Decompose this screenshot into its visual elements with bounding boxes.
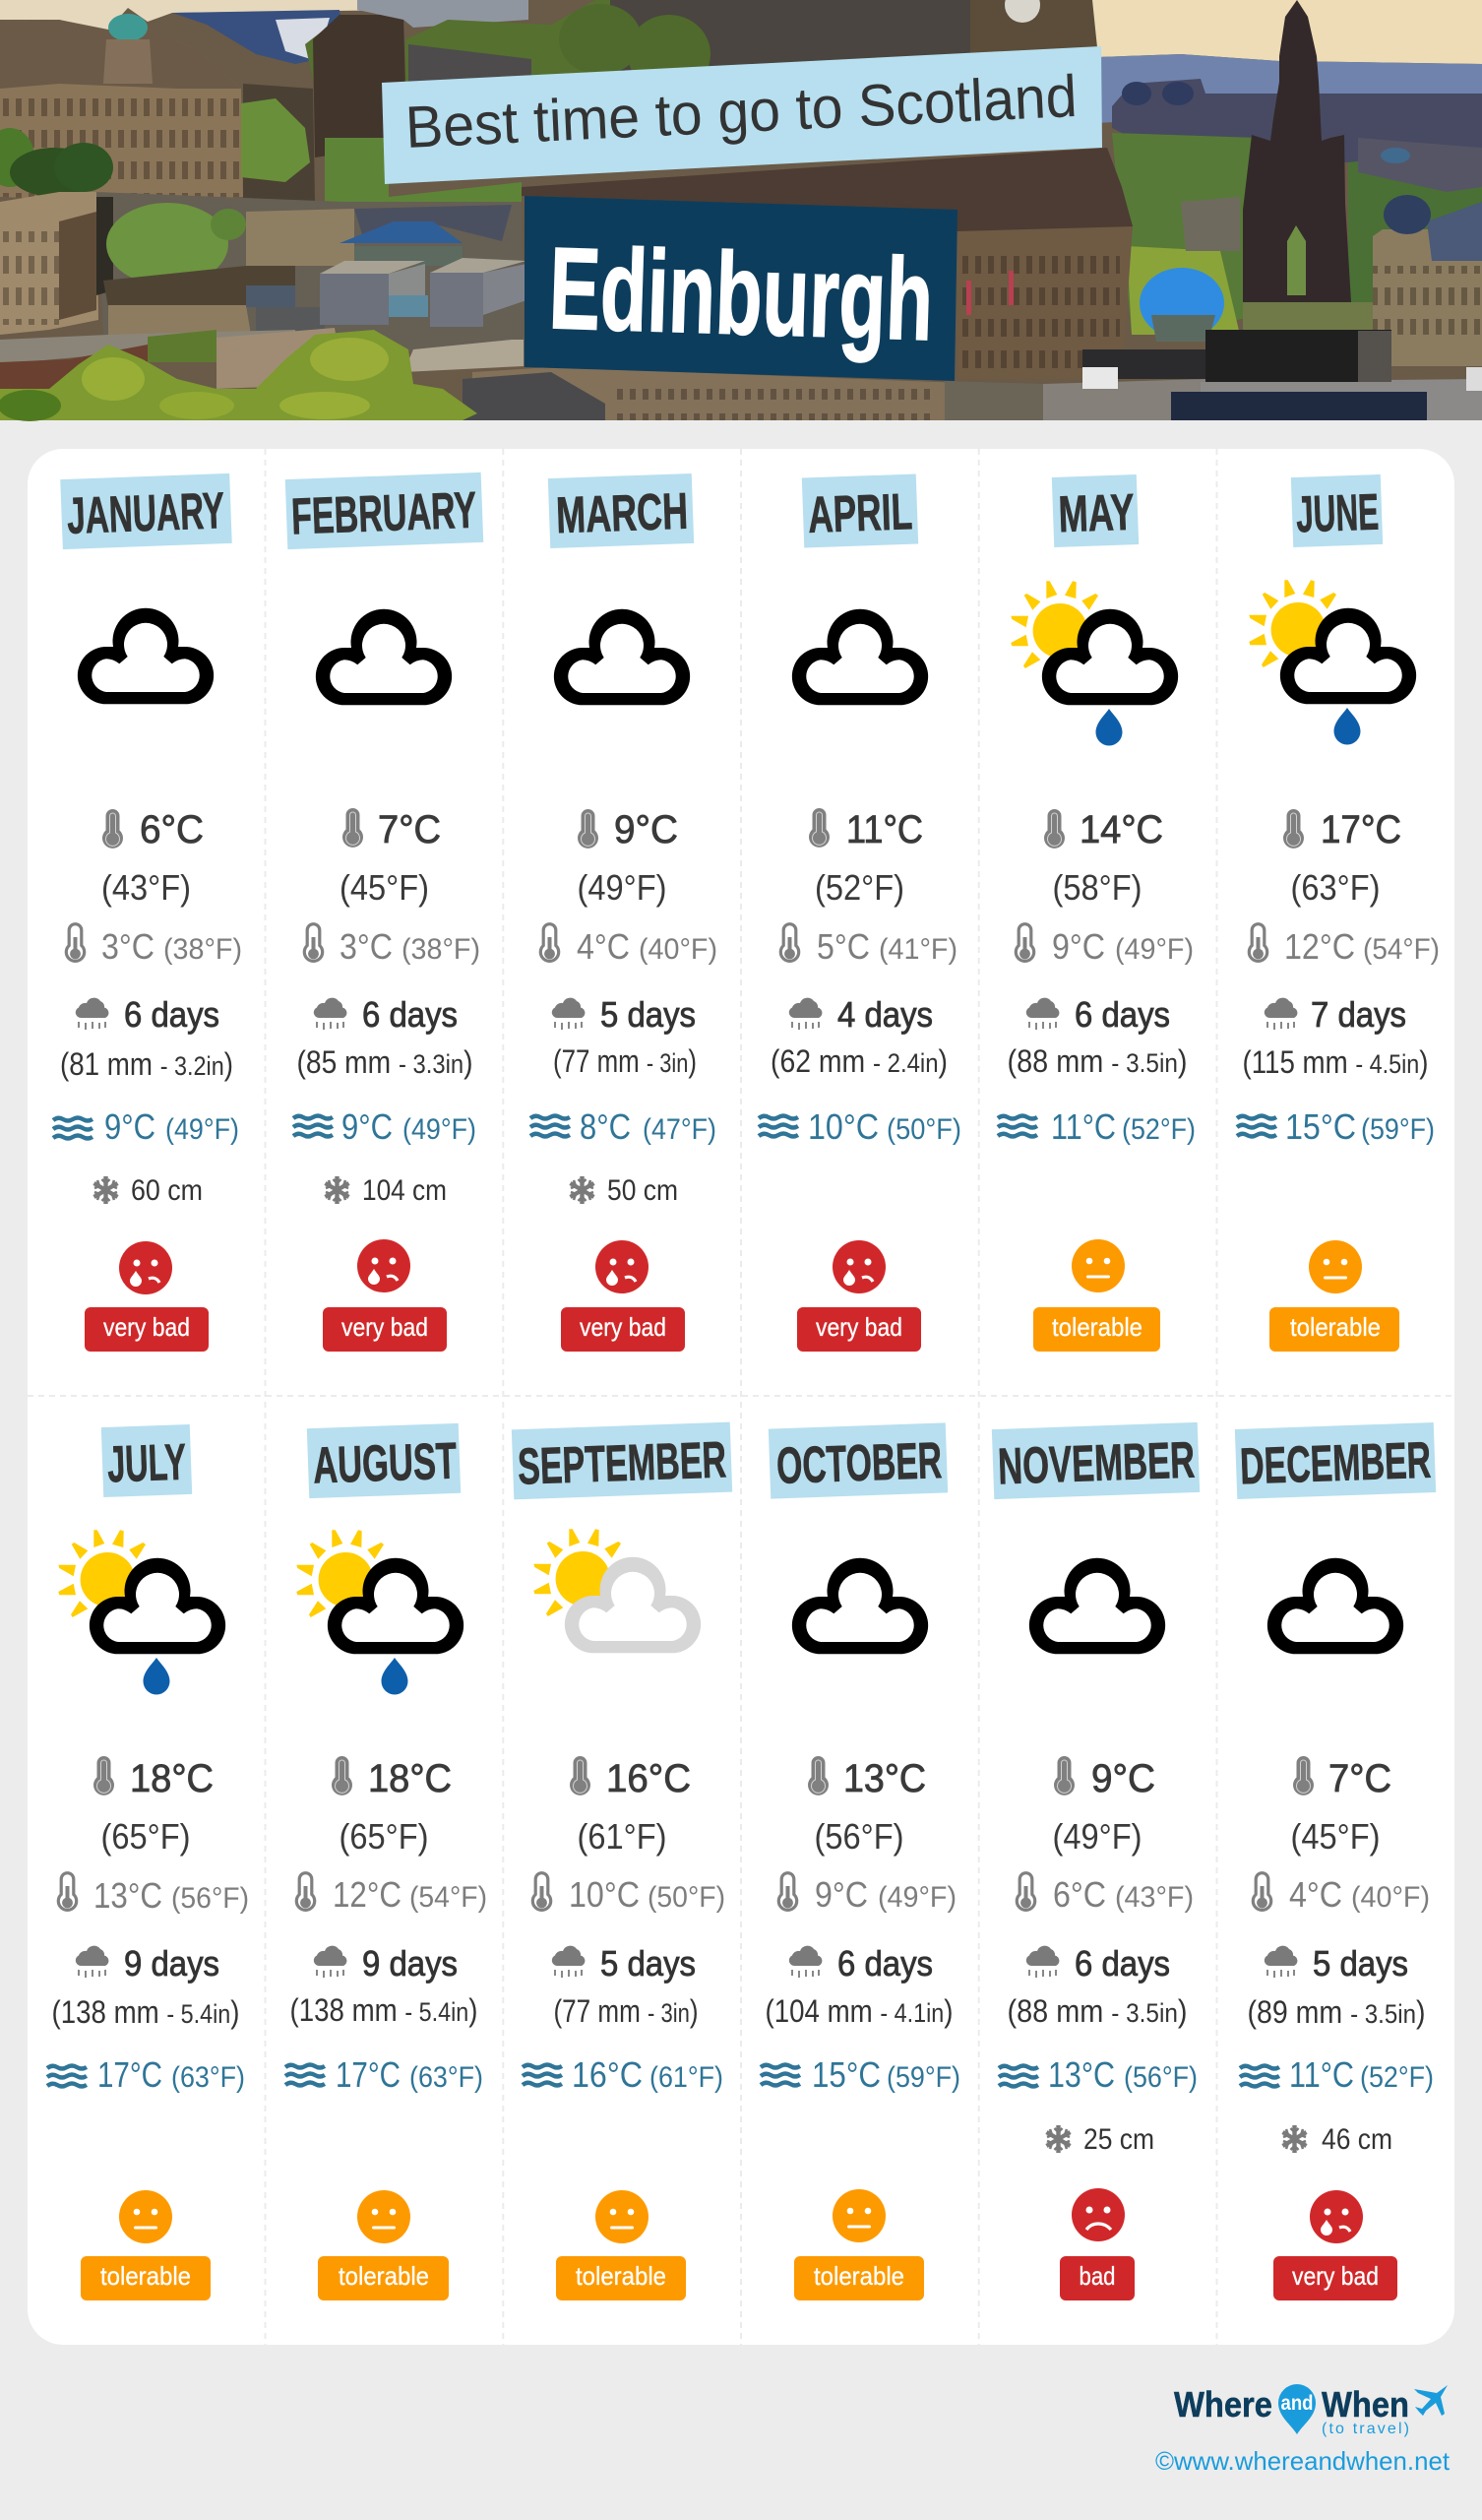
snow (571, 1174, 678, 1207)
rating: tolerable: tolerable (576, 2261, 666, 2291)
sea temperature: (47°F) (643, 1113, 716, 1146)
rating: very bad: very bad (103, 1312, 190, 1342)
sea temperature (523, 2054, 723, 2095)
rainy days: 6 days (124, 994, 219, 1035)
high temperature Fahrenheit: (49°F) (1053, 1816, 1142, 1857)
rainfall: (81 mm - 3.2in) (60, 1046, 233, 1082)
high temperature: 9°C (1091, 1757, 1155, 1800)
high temperature: 13°C (843, 1757, 926, 1800)
label: March (548, 473, 694, 548)
snow (1283, 2123, 1392, 2156)
sea temperature: 17°C (336, 2054, 401, 2095)
sea temperature: 11°C (1051, 1106, 1116, 1147)
label: July (101, 1424, 192, 1497)
sea temperature (998, 1106, 1196, 1147)
high temperature (570, 1756, 691, 1800)
rainfall: (115 mm - 4.5in) (1242, 1044, 1429, 1080)
high temperature: 7°C (378, 808, 441, 851)
label: August (307, 1423, 461, 1498)
high temperature (578, 808, 678, 851)
sea temperature: 15°C (812, 2054, 881, 2095)
rainfall: (138 mm - 5.4in) (289, 1992, 478, 2028)
rating: tolerable: tolerable (100, 2261, 191, 2291)
high temperature Fahrenheit: (43°F) (101, 867, 191, 908)
label: July: JULY (106, 1434, 187, 1493)
rainy days (789, 1943, 933, 1984)
snow: 60 cm (131, 1174, 203, 1207)
rainy days (314, 994, 458, 1035)
sea temperature: 10°C (808, 1106, 879, 1147)
snow (94, 1174, 203, 1207)
logo: Where and When (to travel): and (1281, 2392, 1313, 2415)
icon: cloud (78, 608, 214, 704)
rainfall: (88 mm - 3.5in) (1008, 1043, 1187, 1079)
high temperature: 9°C (614, 808, 678, 851)
label: April: APRIL (807, 483, 913, 544)
rainy days (1026, 1943, 1170, 1984)
sea temperature: (52°F) (1360, 2061, 1434, 2094)
rating: bad: bad (1079, 2261, 1116, 2291)
label: April (802, 473, 918, 548)
high temperature: 6°C (140, 808, 204, 851)
high temperature (1044, 808, 1163, 851)
rainy days (1265, 994, 1406, 1035)
high temperature (809, 808, 923, 851)
rating: tolerable: tolerable (339, 2261, 429, 2291)
icon: cloud (554, 609, 690, 705)
snow (1047, 2123, 1154, 2156)
sea temperature (285, 2054, 483, 2095)
low temperature: (49°F) (878, 1881, 957, 1914)
month: January (53, 473, 242, 1352)
rainy days (552, 994, 696, 1035)
rating: tolerable (81, 2190, 211, 2300)
month: May (998, 474, 1196, 1352)
low temperature (1253, 1873, 1430, 1915)
low temperature: (49°F) (1115, 933, 1194, 966)
sea temperature: (61°F) (649, 2061, 723, 2094)
high temperature Fahrenheit: (45°F) (1291, 1816, 1380, 1857)
low temperature: 12°C (333, 1874, 401, 1915)
rainy days: 6 days (1075, 994, 1170, 1035)
rainy days: 5 days (600, 994, 696, 1035)
low temperature: (40°F) (1351, 1881, 1430, 1914)
low temperature (540, 924, 717, 967)
sea temperature (761, 2054, 960, 2095)
high temperature Fahrenheit: (65°F) (100, 1816, 191, 1857)
rating: very bad (323, 1239, 447, 1352)
rating: bad (1060, 2188, 1135, 2300)
high temperature: 11°C (846, 808, 923, 851)
low temperature: 4°C (1289, 1874, 1342, 1915)
low temperature (58, 1873, 249, 1916)
website credit: ©www.whereandwhen.net (1155, 2446, 1451, 2476)
high temperature (808, 1756, 926, 1800)
sea temperature: (59°F) (1361, 1113, 1435, 1146)
low temperature: 9°C (815, 1874, 868, 1915)
sea temperature (759, 1106, 961, 1147)
rainy days: 6 days (837, 1943, 933, 1984)
rainy days (76, 994, 219, 1035)
sea temperature: 9°C (341, 1106, 393, 1147)
rating: tolerable: tolerable (1052, 1312, 1142, 1342)
high temperature (93, 1756, 214, 1800)
rainfall: (85 mm - 3.3in) (297, 1044, 472, 1080)
logo: Where and When (to travel) (1174, 2384, 1448, 2437)
sea temperature: (63°F) (171, 2061, 245, 2094)
label: November (992, 1422, 1200, 1499)
rating: very bad: very bad (1292, 2261, 1379, 2291)
rainfall: (88 mm - 3.5in) (1008, 1993, 1187, 2029)
low temperature: 6°C (1053, 1874, 1106, 1915)
high temperature (1054, 1756, 1155, 1800)
sea temperature: 15°C (1285, 1106, 1356, 1147)
month: September (512, 1422, 732, 2300)
sea temperature: (52°F) (1122, 1113, 1196, 1146)
snow: 25 cm (1083, 2123, 1154, 2156)
logo: Where and When (to travel): Where (1174, 2384, 1272, 2425)
rainy days: 9 days (124, 1943, 219, 1984)
icon: cloud (316, 609, 452, 705)
label: May: MAY (1058, 484, 1136, 543)
month: November (992, 1422, 1200, 2300)
month: July (47, 1424, 249, 2300)
sea temperature: (49°F) (165, 1113, 239, 1146)
high temperature Fahrenheit: (52°F) (815, 867, 904, 908)
high temperature Fahrenheit: (58°F) (1053, 867, 1142, 908)
low temperature: (50°F) (648, 1881, 725, 1914)
rainy days (789, 994, 933, 1035)
high temperature (1283, 808, 1401, 851)
label: October (769, 1422, 948, 1499)
low temperature (1017, 1873, 1194, 1915)
rating: tolerable (1033, 1239, 1160, 1352)
month: August (285, 1423, 487, 2300)
low temperature: 3°C (101, 926, 154, 967)
banner: Edinburgh: Edinburgh (547, 223, 935, 365)
high temperature: 18°C (368, 1757, 452, 1800)
sea temperature: (49°F) (402, 1113, 476, 1146)
high temperature (102, 808, 204, 851)
rainy days: 5 days (1313, 1943, 1408, 1984)
rating: very bad: very bad (341, 1312, 428, 1342)
low temperature: 10°C (569, 1874, 640, 1915)
rating: very bad (561, 1240, 685, 1352)
label: February: FEBRUARY (290, 482, 477, 545)
rating: tolerable (1269, 1240, 1399, 1352)
label: February (285, 472, 483, 549)
low temperature: 5°C (817, 926, 870, 967)
banner: Best time to go to Scotland: Best time to go to Scotland (403, 63, 1079, 160)
low temperature: (41°F) (879, 933, 957, 966)
high temperature (332, 1756, 452, 1800)
low temperature (532, 1873, 725, 1915)
label: October: OCTOBER (775, 1432, 943, 1495)
sea temperature (293, 1106, 476, 1147)
month: October (761, 1422, 960, 2300)
banner: Best time to go to Scotland (382, 46, 1102, 184)
high temperature: 16°C (606, 1757, 691, 1800)
icon: plane (1414, 2385, 1448, 2416)
sea temperature: (63°F) (409, 2061, 483, 2094)
icon: map pin (1278, 2384, 1316, 2434)
sea temperature (47, 2054, 245, 2095)
icon: sun and pale cloud (533, 1529, 701, 1653)
icon: sun, cloud and rain drop (296, 1530, 463, 1695)
label: August: AUGUST (312, 1432, 458, 1494)
rainy days: 6 days (362, 994, 458, 1035)
icon: sun, cloud and rain drop (58, 1530, 225, 1695)
month: June (1237, 474, 1440, 1352)
rainfall: (138 mm - 5.4in) (51, 1994, 240, 2030)
icon: cloud (1029, 1558, 1165, 1654)
high temperature Fahrenheit: (49°F) (577, 867, 667, 908)
low temperature: (40°F) (639, 933, 717, 966)
sea temperature: 8°C (580, 1106, 631, 1147)
high temperature: 14°C (1080, 808, 1163, 851)
high temperature (342, 808, 441, 851)
high temperature: 17°C (1321, 808, 1401, 851)
rainy days: 4 days (837, 994, 933, 1035)
label: September: SEPTEMBER (517, 1431, 727, 1496)
label: January (60, 473, 232, 549)
rainy days (314, 1943, 458, 1984)
rating: very bad (85, 1241, 209, 1352)
rating: tolerable: tolerable (1290, 1312, 1381, 1342)
label: January: JANUARY (66, 482, 225, 545)
low temperature (778, 1873, 957, 1915)
icon: sun, cloud and rain drop (1011, 581, 1178, 746)
low temperature (1249, 924, 1440, 967)
rainfall: (77 mm - 3in) (553, 1043, 697, 1079)
sea temperature: 11°C (1289, 2054, 1354, 2095)
snow: 104 cm (362, 1174, 447, 1207)
rainy days (76, 1943, 219, 1984)
icon: cloud (792, 1558, 928, 1654)
high temperature (1293, 1756, 1391, 1800)
high temperature Fahrenheit: (56°F) (815, 1816, 903, 1857)
rainy days: 6 days (1075, 1943, 1170, 1984)
low temperature (66, 924, 242, 967)
low temperature: (56°F) (171, 1882, 249, 1915)
rainy days: 7 days (1311, 994, 1406, 1035)
banner: Edinburgh (525, 196, 957, 381)
rainy days (1265, 1943, 1408, 1984)
label: June (1291, 474, 1383, 547)
icon: cloud (792, 609, 928, 705)
rating: very bad (797, 1240, 921, 1352)
rating: tolerable (318, 2190, 449, 2300)
rating: very bad: very bad (816, 1312, 902, 1342)
low temperature: (43°F) (1115, 1881, 1194, 1914)
sea temperature (1237, 1106, 1435, 1147)
panel: months card (28, 449, 1454, 2345)
rating: very bad (1273, 2190, 1397, 2300)
low temperature (1016, 924, 1194, 967)
icon: sun, cloud and rain drop (1249, 580, 1416, 744)
low temperature: (38°F) (163, 933, 242, 966)
snow: 50 cm (607, 1174, 678, 1207)
rainfall: (77 mm - 3in) (553, 1993, 699, 2029)
rating: tolerable: tolerable (814, 2261, 904, 2291)
sea temperature (1240, 2054, 1434, 2095)
header photo: Edinburgh skyline (0, 0, 1482, 421)
sea temperature (999, 2054, 1198, 2095)
rating: tolerable (556, 2190, 686, 2300)
low temperature: 3°C (340, 926, 393, 967)
logo: Where and When (to travel): (to travel) (1322, 2421, 1409, 2437)
rainy days (552, 1943, 696, 1984)
low temperature: 13°C (93, 1875, 162, 1916)
low temperature: (38°F) (401, 933, 480, 966)
rainfall: (62 mm - 2.4in) (771, 1043, 948, 1079)
label: September (512, 1422, 732, 1499)
low temperature: (54°F) (409, 1881, 487, 1914)
high temperature Fahrenheit: (45°F) (340, 867, 429, 908)
sea temperature: (50°F) (887, 1113, 961, 1146)
sea temperature: 16°C (572, 2054, 643, 2095)
logo: Where and When (to travel): When (1322, 2384, 1409, 2425)
low temperature: 4°C (577, 926, 630, 967)
label: November: NOVEMBER (997, 1431, 1196, 1495)
high temperature Fahrenheit: (63°F) (1291, 867, 1380, 908)
sea temperature (530, 1106, 716, 1147)
rating: tolerable (794, 2189, 924, 2300)
month: April (759, 473, 961, 1352)
sea temperature: (59°F) (887, 2061, 960, 2094)
rainfall: (104 mm - 4.1in) (766, 1993, 953, 2029)
low temperature (780, 924, 957, 967)
high temperature: 18°C (130, 1757, 214, 1800)
sea temperature: 9°C (104, 1106, 155, 1147)
month: December (1235, 1422, 1436, 2300)
high temperature Fahrenheit: (61°F) (577, 1816, 667, 1857)
rainy days: 5 days (600, 1943, 696, 1984)
month: March (530, 473, 717, 1352)
label: May (1052, 474, 1139, 547)
rainy days: 9 days (362, 1943, 458, 1984)
high temperature: 7°C (1328, 1757, 1391, 1800)
sea temperature: 17°C (97, 2054, 162, 2095)
low temperature: (54°F) (1363, 933, 1440, 966)
rainy days (1026, 994, 1170, 1035)
sea temperature (53, 1106, 239, 1147)
sea temperature: 13°C (1048, 2054, 1115, 2095)
sea temperature: (56°F) (1124, 2061, 1198, 2094)
low temperature (296, 1873, 487, 1915)
high temperature Fahrenheit: (65°F) (339, 1816, 429, 1857)
label: June: JUNE (1295, 484, 1380, 543)
rating: very bad: very bad (580, 1312, 666, 1342)
low temperature: 9°C (1052, 926, 1105, 967)
low temperature (304, 924, 480, 967)
low temperature: 12°C (1284, 926, 1355, 967)
label: March: MARCH (555, 483, 689, 544)
snow: 46 cm (1322, 2123, 1392, 2156)
rainfall: (89 mm - 3.5in) (1248, 1994, 1425, 2030)
month: February (285, 472, 483, 1352)
snow (325, 1174, 447, 1207)
icon: cloud (1267, 1558, 1403, 1654)
